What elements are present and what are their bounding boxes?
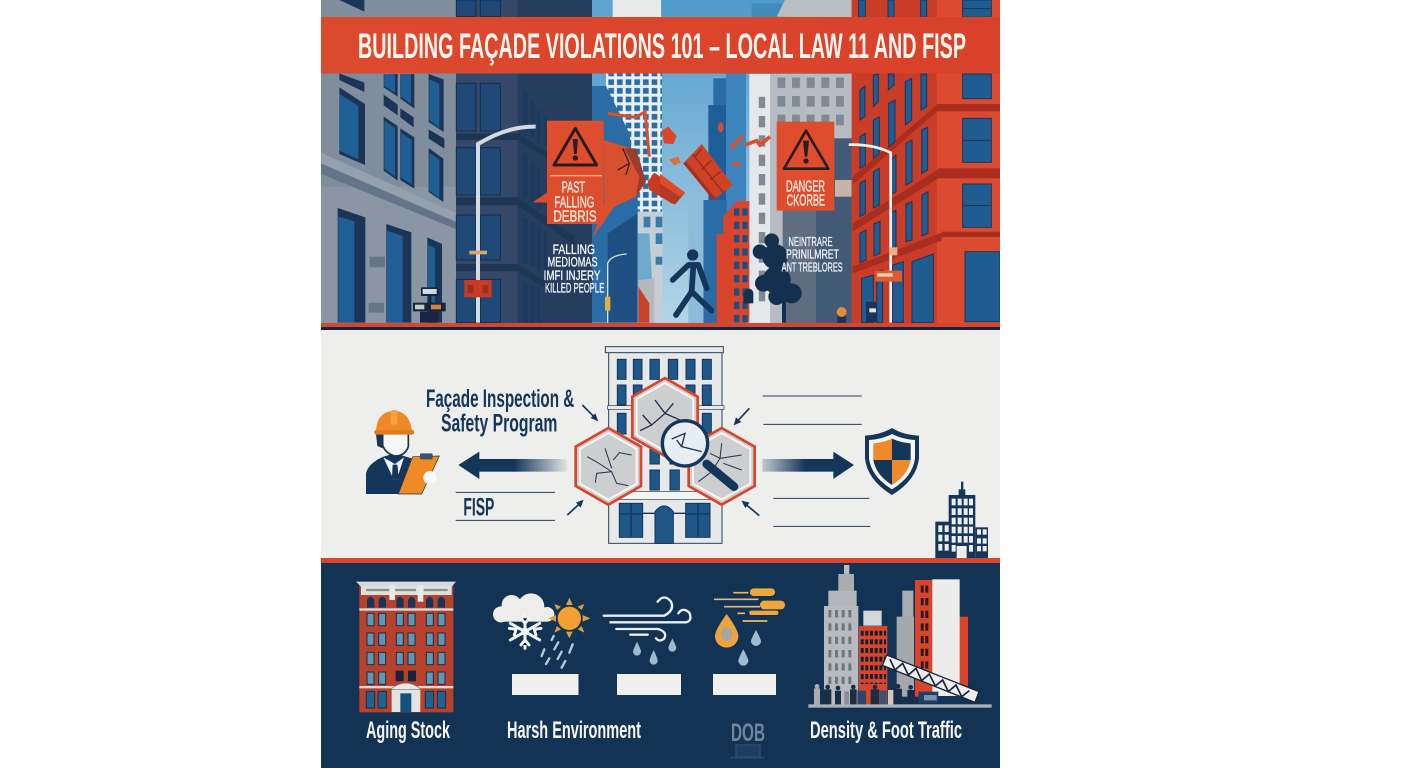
crowd of pedestrians <box>814 684 914 705</box>
label: DOB: DOB <box>731 719 765 747</box>
caption: falling debris injured people: IMFI INJERY <box>544 267 601 283</box>
label: DOB <box>730 719 765 758</box>
icon: shield <box>865 428 919 495</box>
warning sign: danger: CKORBE <box>787 192 825 209</box>
title banner <box>321 17 1000 74</box>
heading: facade inspection: Façade Inspection & <box>426 385 574 413</box>
icon: heat and moisture <box>714 588 785 666</box>
caption: right warning: NEINTRARE <box>788 234 833 249</box>
lamp left <box>413 127 536 323</box>
white label placeholder 2 <box>617 674 681 695</box>
heading: facade inspection: Safety Program <box>441 409 557 437</box>
icon: dense city with sidewalk shed <box>808 565 992 708</box>
icon: harsh weather <box>493 593 590 668</box>
right column in second crop frame <box>865 428 988 560</box>
warning sign: danger <box>777 122 834 211</box>
arrow: left to inspector <box>458 452 567 479</box>
warning sign: past falling debris <box>533 121 604 226</box>
dark middle building <box>456 0 592 323</box>
icon: inspector <box>366 410 439 494</box>
icon: small city <box>935 482 988 560</box>
blank label lines <box>456 396 870 526</box>
label: aging stock: Aging Stock <box>366 717 450 744</box>
caption: falling debris injured people: MEDIOMAS <box>548 254 598 270</box>
right skyline <box>688 0 1000 323</box>
caption: right warning: PRINILMRET <box>786 247 839 262</box>
hexagon: cracks top <box>632 378 698 456</box>
icon: aging building <box>356 582 456 712</box>
caption: falling debris injured people: FALLING <box>553 241 595 257</box>
heading: facade inspection <box>427 389 574 436</box>
icon: wind and rain <box>604 597 690 665</box>
caption: falling debris injured people: KILLED PEOPLE <box>545 280 604 296</box>
arrow: right to shield <box>762 452 854 479</box>
title: BUILDING FAÇADE VIOLATIONS 101 – LOCAL LAW 11 AND FISP <box>358 27 966 66</box>
icon: magnifying glass <box>662 421 734 487</box>
tree <box>743 233 802 323</box>
hexagon: cracks right <box>689 428 755 505</box>
label: density and foot traffic: Density & Foot Traffic <box>810 717 962 744</box>
label: FISP: FISP <box>463 494 494 522</box>
sidewalk shed truss <box>882 655 979 702</box>
white label placeholder 3 <box>713 674 776 695</box>
hexagon: cracks left <box>576 428 641 505</box>
small pointer arrows <box>567 405 759 516</box>
panel: risk factors <box>321 563 1000 768</box>
white label placeholder 1 <box>512 674 578 695</box>
label: harsh environment: Harsh Environment <box>507 717 641 744</box>
sign text <box>554 181 596 222</box>
caption: falling debris injured people <box>544 244 604 293</box>
left grey building <box>321 0 464 323</box>
icon: pedestrian <box>673 249 712 315</box>
street lamp right <box>849 145 891 323</box>
red building <box>852 0 937 323</box>
distant towers <box>592 0 663 323</box>
hydrant & pedestrians <box>837 308 846 323</box>
panel: street scene <box>321 0 1000 330</box>
sign text: FALLING <box>554 194 594 211</box>
sign text: DEBRIS <box>553 209 597 226</box>
panel: FISP inspection <box>321 330 1000 560</box>
central building <box>605 347 724 543</box>
caption: right warning: ANT TREBLORES <box>782 259 843 274</box>
icon: warning triangle <box>554 128 597 165</box>
sign text: PAST <box>562 180 585 197</box>
icon: danger triangle <box>784 131 828 169</box>
caption: right warning <box>782 236 842 272</box>
warning sign: danger: DANGER <box>786 178 825 195</box>
falling debris and cracked facade <box>593 112 681 237</box>
